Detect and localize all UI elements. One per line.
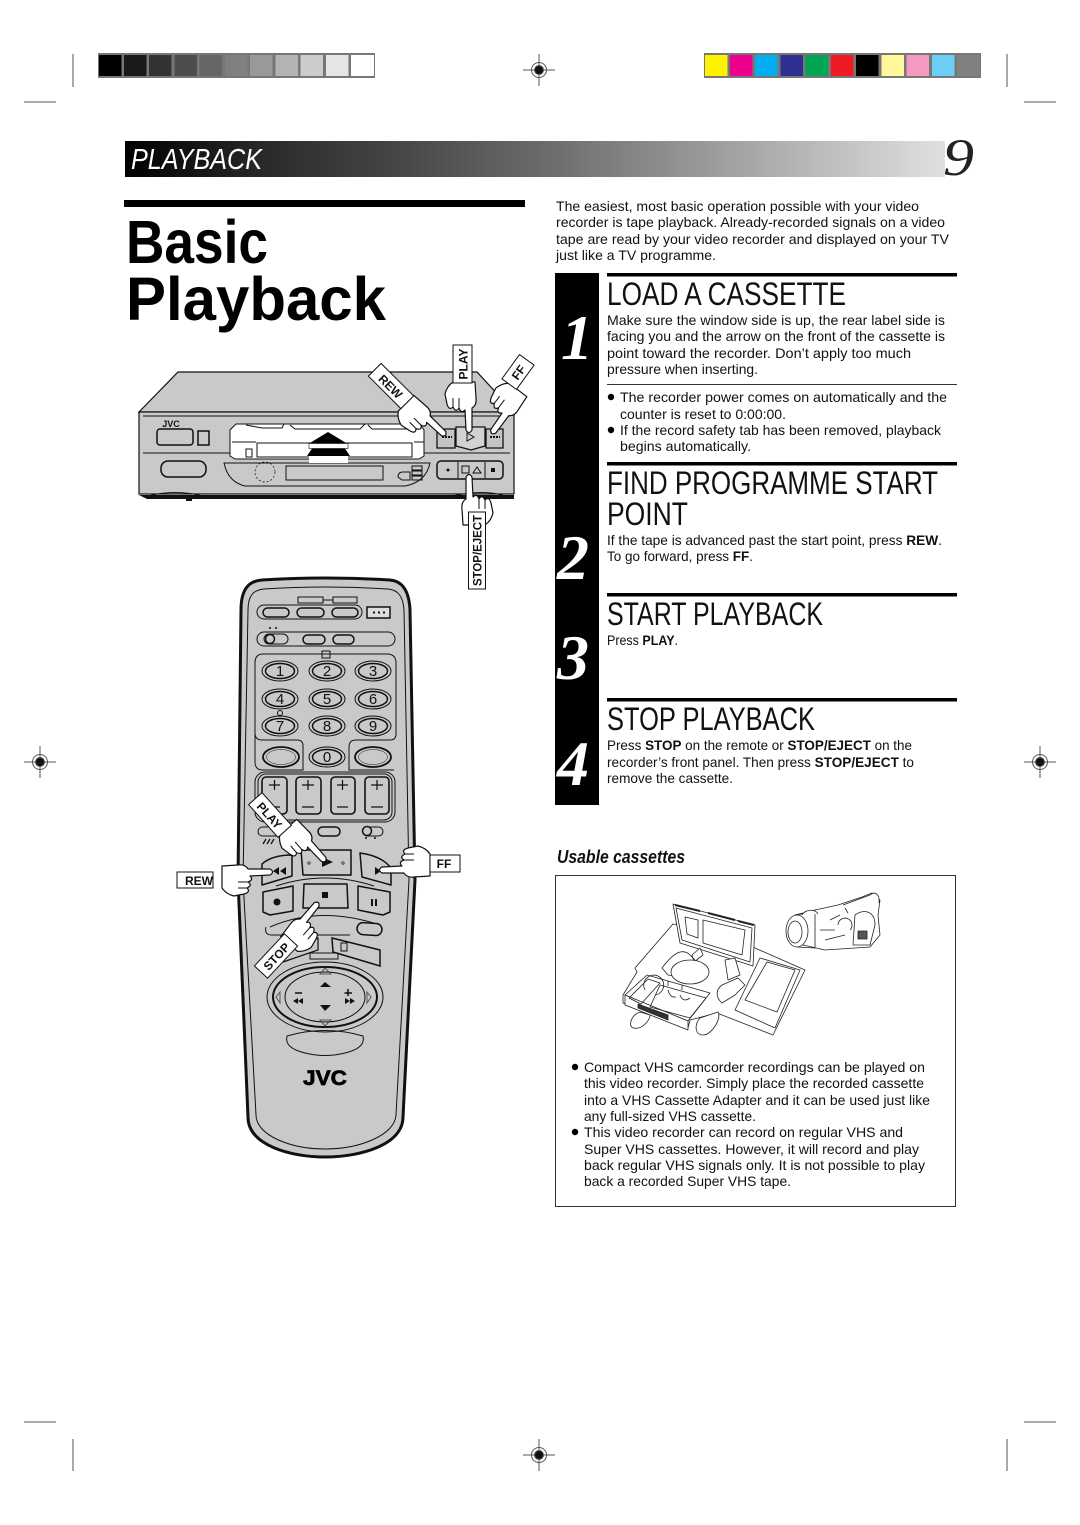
- step number column: 1: [561, 302, 593, 373]
- illustration: VHS cassette adapter: [623, 904, 805, 1035]
- intro text: [555, 198, 950, 263]
- illustration: remote control: [177, 578, 460, 1157]
- intro text: recorder is tape playback. Already-recorded signals on a video: [556, 214, 945, 230]
- REW label: [368, 363, 414, 409]
- remote STOP label: STOP: [261, 940, 293, 973]
- title: Playback: [126, 265, 386, 333]
- remote STOP label: [254, 934, 298, 978]
- remote REW label: [177, 872, 214, 888]
- title rule: [124, 200, 525, 207]
- title: [126, 208, 386, 333]
- cassette being inserted: [230, 424, 424, 459]
- step 3: [607, 593, 957, 648]
- intro text: just like a TV programme.: [555, 247, 716, 263]
- number keypad: 1: [276, 663, 284, 680]
- STOP/EJECT label: STOP/EJECT: [470, 514, 484, 586]
- panel bullet text: any full-sized VHS cassette.: [584, 1108, 756, 1124]
- illustration: video recorder: [139, 345, 534, 589]
- step 2: To go forward, press FF.: [607, 548, 753, 564]
- step 1: begins automatically.: [620, 438, 751, 454]
- step 1: point toward the recorder. Don’t apply too much: [607, 345, 911, 361]
- panel bullet text: into a VHS Cassette Adapter and it can be used just like: [584, 1092, 930, 1108]
- number keypad: 6: [369, 691, 377, 708]
- volume and channel buttons: [255, 772, 395, 822]
- transport glyphs: [273, 857, 381, 906]
- number keypad: 2: [323, 663, 331, 680]
- hand pressing remote FF: [380, 846, 430, 877]
- step 1: pressure when inserting.: [607, 361, 758, 377]
- remote PLAY label: PLAY: [254, 800, 285, 832]
- hand pressing remote STOP: [280, 898, 336, 956]
- step 4: [607, 698, 957, 786]
- remote PLAY label: [249, 793, 291, 837]
- panel bullet text: this video recorder. Simply place the recorded cassette: [584, 1075, 924, 1091]
- step number column: 4: [556, 728, 589, 799]
- remote FF label: FF: [437, 857, 451, 871]
- number keypad: 0: [323, 749, 331, 766]
- panel bullet text: back regular VHS signals only. It is not possible to play: [584, 1157, 925, 1173]
- step 3: Press PLAY.: [607, 632, 678, 648]
- step 4: Press STOP on the remote or STOP/EJECT on the: [607, 737, 912, 753]
- step 1: [607, 273, 957, 454]
- hand pressing remote PLAY: [274, 819, 331, 877]
- intro text: The easiest, most basic operation possible with your video: [556, 198, 919, 214]
- step 2: If the tape is advanced past the start point, press REW.: [607, 532, 942, 548]
- REW label: REW: [375, 372, 406, 402]
- number keypad: 8: [323, 718, 331, 735]
- step 4: STOP PLAYBACK: [607, 701, 815, 737]
- remote FF label: [430, 855, 460, 872]
- remote REW label: REW: [185, 874, 214, 888]
- hand pressing REW: [393, 395, 450, 452]
- panel bullet text: Super VHS cassettes. However, it will record and play: [584, 1141, 919, 1157]
- section header bar: [125, 141, 945, 177]
- panel bullet text: This video recorder can record on regular VHS and: [584, 1124, 903, 1140]
- number keypad: 7: [276, 718, 284, 735]
- FF label: FF: [509, 363, 529, 383]
- number keypad: 4: [276, 691, 284, 708]
- remote JVC logo: JVC: [303, 1067, 347, 1090]
- step 1: LOAD A CASSETTE: [607, 276, 846, 312]
- small control row: [258, 826, 383, 844]
- PLAY label: PLAY: [456, 349, 470, 379]
- lower controls: [266, 915, 382, 966]
- PLAY label: [453, 345, 472, 383]
- step 4: remove the cassette.: [607, 770, 733, 786]
- usable cassettes heading: Usable cassettes: [557, 847, 685, 867]
- recorder transport buttons: [398, 427, 503, 480]
- step 3: START PLAYBACK: [607, 596, 823, 632]
- step number column: 3: [556, 622, 589, 693]
- intro text: tape are read by your video recorder and displayed on your TV: [556, 231, 950, 247]
- step 1: The recorder power comes on automatically and the: [620, 389, 947, 405]
- step 2: FIND PROGRAMME START: [607, 465, 938, 501]
- top buttons: [257, 597, 395, 658]
- tape transport buttons: [262, 850, 391, 915]
- panel bullet text: [584, 1059, 930, 1189]
- number keypad: [255, 654, 396, 770]
- panel: usable cassettes: [556, 876, 956, 1206]
- hand pressing STOP/EJECT: [462, 474, 493, 525]
- grayscale calibration strip: [98, 53, 375, 78]
- number keypad: 5: [323, 691, 331, 708]
- title: Basic: [126, 208, 268, 276]
- hand pressing FF: [473, 379, 528, 438]
- step number column: [555, 273, 599, 805]
- step 1: Make sure the window side is up, the rear label side is: [607, 312, 945, 328]
- page number: 9: [943, 129, 974, 187]
- step 1: counter is reset to 0:00:00.: [620, 406, 786, 422]
- colour calibration strip: [704, 53, 981, 78]
- step 1: facing you and the arrow on the front of the cassette is: [607, 328, 945, 344]
- number keypad: 9: [369, 718, 377, 735]
- section header bar: PLAYBACK: [131, 144, 263, 176]
- step number column: 2: [556, 522, 589, 593]
- panel bullet text: Compact VHS camcorder recordings can be played on: [584, 1059, 925, 1075]
- navigation ring: [267, 962, 383, 1056]
- hand pressing PLAY: [445, 382, 476, 432]
- step 2: [607, 462, 957, 564]
- step 2: POINT: [607, 496, 688, 532]
- number keypad: 3: [369, 663, 377, 680]
- FF label: [502, 355, 534, 389]
- illustration: camcorder: [786, 893, 880, 950]
- illustration: video recorder: JVC: [162, 419, 180, 429]
- step 1: If the record safety tab has been removed, playback: [620, 422, 942, 438]
- insertion arrow: [307, 432, 350, 463]
- panel bullet text: back a recorded Super VHS tape.: [584, 1173, 791, 1189]
- hand pressing remote REW: [222, 865, 272, 896]
- step 4: recorder’s front panel. Then press STOP/EJECT to: [607, 754, 914, 770]
